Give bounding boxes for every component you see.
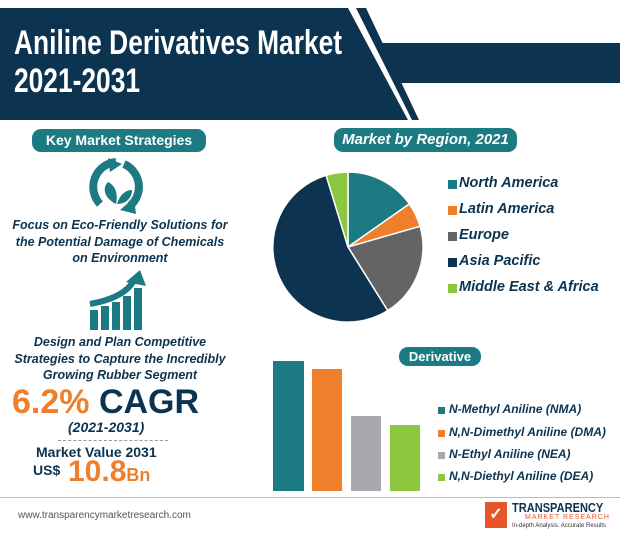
text: eco-friendly strategy: Focus on Eco-Friendly Solutions for bbox=[12, 218, 228, 232]
market value bbox=[33, 444, 157, 488]
market value: 10.8Bn bbox=[68, 455, 150, 488]
legend: derivatives: N,N-Dimethyl Aniline (DMA) bbox=[449, 425, 606, 439]
icon: growth chart bbox=[90, 270, 146, 330]
text: eco-friendly strategy: on Environment bbox=[72, 251, 168, 265]
heading: key market strategies bbox=[32, 129, 206, 152]
legend: regions: Europe bbox=[459, 227, 509, 243]
icon: eco recycle bbox=[89, 158, 143, 214]
legend: derivatives: N-Ethyl Aniline (NEA) bbox=[449, 447, 571, 461]
footer url: www.transparencymarketresearch.com bbox=[18, 510, 191, 521]
title bbox=[14, 24, 342, 100]
legend: derivatives: N-Methyl Aniline (NMA) bbox=[449, 402, 581, 416]
market value: US$ bbox=[33, 462, 60, 478]
legend: derivatives: N,N-Diethyl Aniline (DEA) bbox=[449, 469, 593, 483]
text: competitive strategy bbox=[14, 335, 226, 382]
title: 2021-2031 bbox=[14, 62, 140, 100]
text: competitive strategy: Growing Rubber Segment bbox=[43, 368, 197, 382]
legend: derivatives bbox=[438, 402, 606, 483]
legend: regions: North America bbox=[459, 175, 558, 191]
text: eco-friendly strategy: the Potential Damage of Chemicals bbox=[16, 234, 224, 248]
heading: market by region: Market by Region, 2021 bbox=[342, 131, 509, 148]
logo: MARKET RESEARCH bbox=[525, 514, 610, 521]
text: cagr period: (2021-2031) bbox=[68, 419, 144, 435]
legend: regions: Middle East & Africa bbox=[459, 279, 599, 295]
text: eco-friendly strategy bbox=[12, 218, 228, 265]
CAGR: 6.2% CAGR bbox=[12, 383, 199, 421]
title: Aniline Derivatives Market bbox=[14, 24, 342, 62]
logo: ✓ bbox=[489, 506, 503, 523]
header banner bbox=[0, 8, 620, 120]
text: competitive strategy: Design and Plan Competitive bbox=[34, 335, 206, 349]
heading: key market strategies: Key Market Strategies bbox=[46, 132, 192, 148]
text: competitive strategy: Strategies to Capture the Incredibly bbox=[14, 352, 226, 366]
logo: In-depth Analysis. Accurate Results bbox=[512, 523, 606, 529]
logo bbox=[485, 500, 610, 529]
market value: Market Value 2031 bbox=[36, 444, 157, 460]
legend: regions: Latin America bbox=[459, 201, 554, 217]
heading: market by region bbox=[334, 128, 517, 152]
legend: regions bbox=[448, 175, 599, 295]
legend: regions: Asia Pacific bbox=[459, 253, 540, 269]
heading: derivative: Derivative bbox=[409, 349, 471, 364]
bar chart bbox=[273, 361, 420, 491]
logo: TRANSPARENCY bbox=[512, 500, 603, 515]
heading: derivative bbox=[399, 347, 481, 366]
